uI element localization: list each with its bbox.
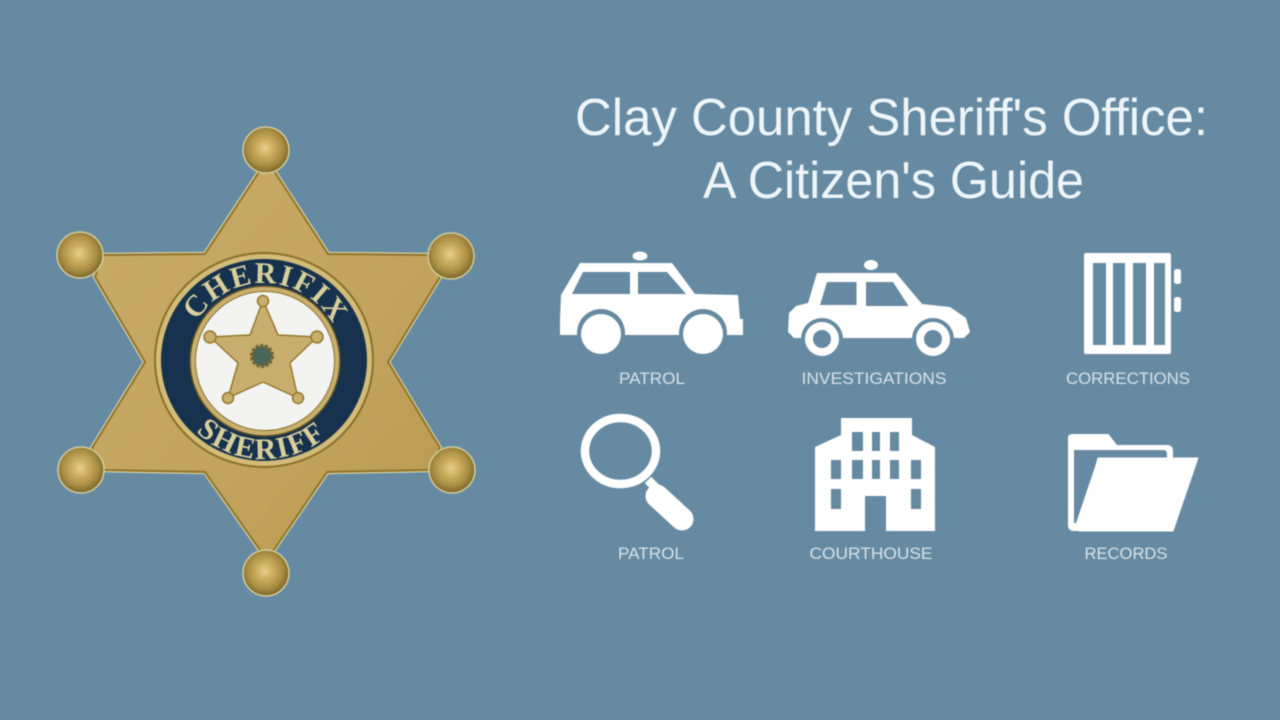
icon: courthouse building: [815, 418, 935, 531]
label: corrections: CORRECTIONS: [1066, 369, 1190, 388]
label: courthouse: COURTHOUSE: [810, 544, 932, 563]
icon: records folder: [1068, 434, 1198, 531]
icon: corrections cell bars: [1084, 253, 1181, 354]
seal text bottom: SHERIFF: [197, 418, 320, 460]
icon: magnifying glass: [585, 418, 682, 519]
seal ring: [155, 253, 373, 467]
small center star: [204, 296, 323, 404]
seal text top: CHERIFIX: [184, 262, 348, 324]
six-point gold star: [92, 160, 440, 560]
title: Clay County Sheriff's Office:: [575, 89, 1208, 147]
badge knobs: [57, 127, 475, 596]
label: patrol second: PATROL: [618, 544, 684, 563]
label: patrol: PATROL: [619, 369, 685, 388]
icon: investigations car: [788, 260, 970, 360]
icon: patrol car: [560, 252, 743, 359]
title: A Citizen's Guide: [703, 152, 1084, 210]
label: investigations: INVESTIGATIONS: [802, 369, 946, 388]
sheriff badge: [56, 126, 476, 598]
label: records: RECORDS: [1084, 544, 1168, 563]
title: [575, 89, 1208, 210]
